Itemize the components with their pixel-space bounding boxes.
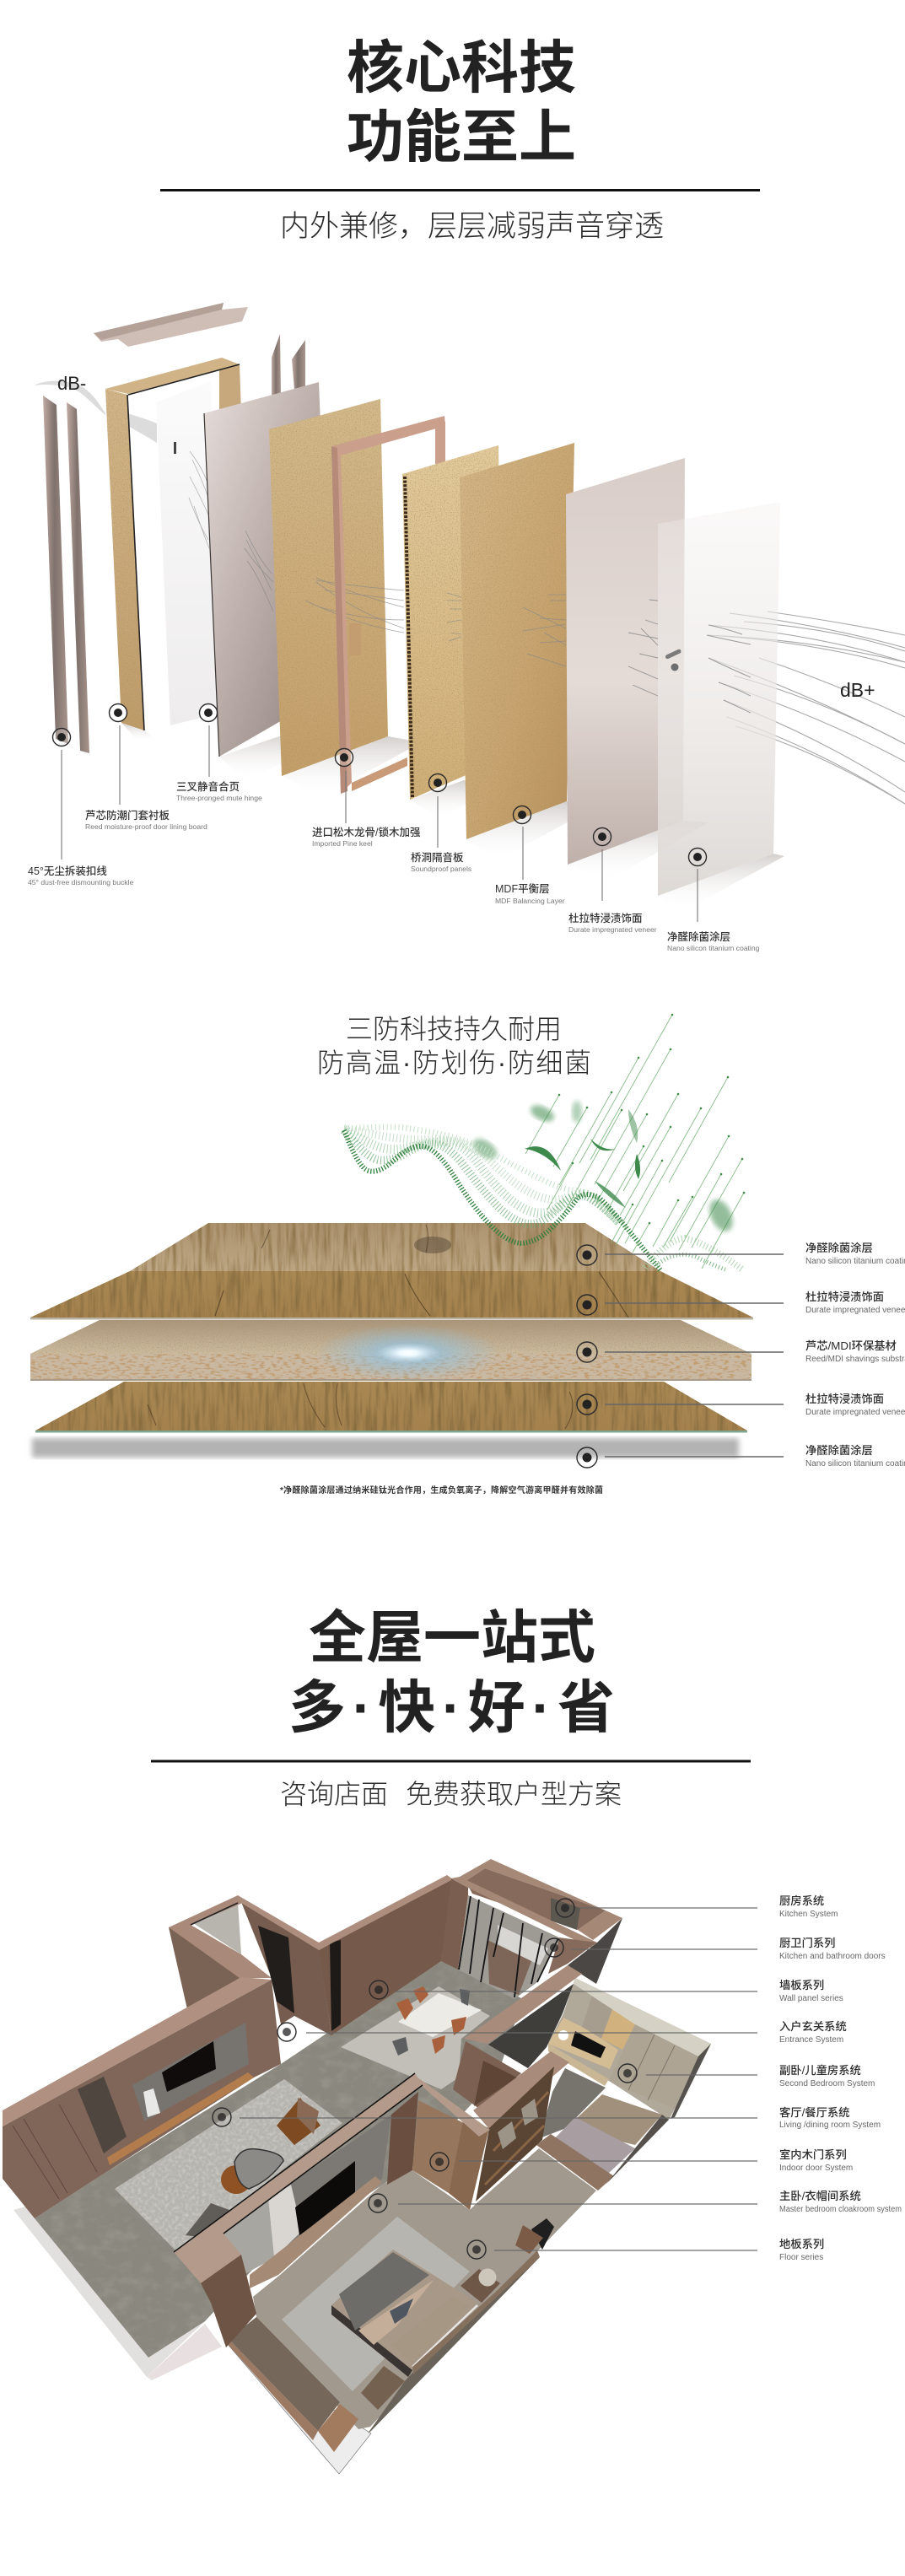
panel: MDF balancing bbox=[460, 443, 574, 839]
markers and leader lines bbox=[213, 1899, 757, 2259]
floor plan labels: 主卧/衣帽间系统 bbox=[779, 2189, 861, 2202]
sound strands bbox=[447, 593, 461, 641]
nightstands bbox=[361, 2269, 500, 2410]
side trim strip 2 bbox=[67, 402, 89, 753]
white back sheet bbox=[156, 381, 221, 725]
door labels: Reed moisture-proof door lining board bbox=[85, 822, 207, 831]
subtitle: 内外兼修: 内外兼修，层层减弱声音穿透 bbox=[280, 210, 664, 243]
door labels: 45°无尘拆装扣线 bbox=[28, 865, 107, 877]
floor plan labels bbox=[779, 1894, 902, 2262]
master bedroom floor bbox=[253, 2148, 596, 2429]
door labels: Nano silicon titanium coating bbox=[667, 944, 760, 952]
shadow under board bbox=[32, 1438, 739, 1458]
door handle bbox=[665, 649, 681, 671]
sound strands bbox=[523, 595, 566, 666]
floor plan labels: Kitchen and bathroom doors bbox=[779, 1952, 886, 1961]
shadow under panels bbox=[121, 723, 784, 911]
panel: MDF 1 bbox=[269, 399, 388, 776]
lower wall and TV bbox=[224, 2092, 489, 2288]
dB- label: dB- bbox=[57, 373, 86, 394]
sound waves in front bbox=[707, 625, 751, 713]
lintel trim bbox=[94, 303, 248, 347]
floor plan labels: Second Bedroom System bbox=[779, 2079, 875, 2088]
dB- sound wave bbox=[34, 381, 157, 443]
end block bbox=[318, 2404, 358, 2452]
door labels: 杜拉特浸渍饰面 bbox=[568, 912, 643, 924]
panel: honeycomb soundproof bbox=[402, 445, 503, 800]
floor plan labels: 地板系列 bbox=[779, 2238, 824, 2250]
floor plan labels: 副卧/儿童房系统 bbox=[779, 2063, 861, 2077]
door labels: Imported Pine keel bbox=[312, 839, 373, 848]
door labels bbox=[28, 780, 760, 952]
floor plan labels: Floor series bbox=[779, 2253, 823, 2262]
sound strands bbox=[189, 451, 209, 548]
heading: 三防科技: 三防科技持久耐用 bbox=[346, 1014, 562, 1044]
title: 核心科技 功能至上 bbox=[347, 36, 576, 170]
layer: top coating bbox=[130, 1223, 660, 1271]
cabinet bbox=[476, 2067, 554, 2201]
wood piece and bag bbox=[515, 2218, 554, 2254]
entrance wall bbox=[238, 1895, 331, 2035]
floor plan labels: Living /dining room System bbox=[779, 2121, 881, 2130]
strip by cabinet bbox=[473, 2051, 569, 2130]
floor plan labels: 室内木门系列 bbox=[779, 2148, 847, 2161]
door labels: 进口松木龙骨/锁木加强 bbox=[312, 826, 421, 838]
layer: reed substrate bbox=[30, 1320, 751, 1381]
door labels: 桥洞隔音板 bbox=[411, 851, 464, 864]
panel: impregnated veneer bbox=[566, 458, 685, 865]
sound strands crossing bbox=[305, 578, 404, 633]
door labels: 芦芯防潮门套衬板 bbox=[85, 809, 170, 822]
floor plan labels: Kitchen System bbox=[779, 1910, 838, 1919]
panel: nano coating bbox=[658, 502, 780, 896]
panel: pine keel frame bbox=[331, 416, 445, 794]
door labels: 45° dust-free dismounting buckle bbox=[28, 878, 133, 887]
upright trims bbox=[272, 334, 305, 400]
floor plan labels: 客厅/餐厅系统 bbox=[779, 2105, 849, 2119]
floor plan labels: 入户玄关系统 bbox=[779, 2019, 847, 2033]
central wall top bbox=[174, 2073, 490, 2347]
board labels: 净醛除菌涂层 bbox=[805, 1443, 873, 1457]
right ledge bbox=[368, 2250, 540, 2433]
TV wall bbox=[3, 1977, 281, 2218]
layer: lower veneer bbox=[35, 1382, 747, 1432]
board labels bbox=[805, 1241, 905, 1469]
frame top bbox=[105, 358, 240, 395]
dining rug bbox=[341, 1986, 490, 2089]
living rug bbox=[115, 2079, 342, 2252]
title: 全屋一站式 多快好省: 多·快·好·省 bbox=[288, 1676, 615, 1740]
door labels: MDF平衡层 bbox=[495, 883, 550, 895]
heading: 三防科技: 防高温·防划伤·防细菌 bbox=[317, 1048, 591, 1078]
title: 核心科技 功能至上: 核心科技 bbox=[347, 36, 576, 100]
floor plan labels: Wall panel series bbox=[779, 1994, 843, 2003]
subtitle: 咨询店面: 免费获取户型方案 bbox=[406, 1779, 622, 1809]
floor plan labels: Indoor door System bbox=[779, 2164, 853, 2173]
white base margin bbox=[13, 2185, 371, 2474]
heading: 三防科技 bbox=[317, 1014, 591, 1078]
door labels: 净醛除菌涂层 bbox=[667, 930, 730, 943]
door labels: 三叉静音合页 bbox=[176, 780, 240, 793]
armchair bbox=[277, 2098, 321, 2145]
title: 核心科技 功能至上: 功能至上 bbox=[347, 105, 576, 170]
middle dark wall bbox=[464, 1965, 582, 2068]
sound strands bbox=[628, 600, 658, 696]
green leaves bbox=[470, 1101, 737, 1235]
second bedroom bbox=[548, 1978, 711, 2120]
door exploded diagram bbox=[28, 303, 905, 952]
marble floor bbox=[35, 1957, 523, 2358]
hinge bbox=[174, 442, 176, 454]
title: 全屋一站式 多快好省: 全屋一站式 bbox=[309, 1606, 595, 1670]
board labels: 芦芯/MDI环保基材 bbox=[805, 1339, 897, 1352]
floor plan labels: Entrance System bbox=[779, 2035, 843, 2045]
green rain lines bbox=[525, 1015, 744, 1269]
upper left room bbox=[169, 1895, 272, 2009]
master rug bbox=[282, 2217, 470, 2391]
second bedroom floor and bed bbox=[536, 2068, 669, 2191]
coffee table and ottoman bbox=[221, 2149, 283, 2194]
sound strands bbox=[245, 531, 273, 612]
glow bbox=[315, 1324, 501, 1382]
door labels: Soundproof panels bbox=[411, 865, 471, 873]
panel: veneer 1 bbox=[204, 382, 331, 757]
door labels: Durate impregnated veneer bbox=[568, 925, 657, 934]
door labels: MDF Balancing Layer bbox=[495, 897, 565, 905]
back wall bbox=[319, 1875, 453, 2035]
footnote: *净醛除菌涂层通过纳米硅钛光合作用，生成负氧离子，降解空气游离甲醛并有效除菌 bbox=[280, 1485, 603, 1495]
green dotted wave bbox=[344, 1127, 742, 1270]
markers and leader lines bbox=[52, 703, 707, 922]
layer: upper veneer bbox=[30, 1271, 753, 1319]
handle block bbox=[349, 623, 361, 655]
door wall bbox=[453, 2041, 521, 2109]
side trim strip 1 bbox=[43, 396, 68, 744]
board labels: 杜拉特浸渍饰面 bbox=[805, 1290, 884, 1303]
frame jamb bbox=[105, 389, 144, 730]
title: 全屋一站式 多快好省 bbox=[288, 1606, 615, 1740]
floor plan labels: 墙板系列 bbox=[779, 1978, 824, 1991]
bench bbox=[226, 2317, 340, 2440]
frame far jamb bbox=[219, 364, 241, 420]
sound waves behind door bbox=[707, 612, 905, 804]
board labels: 净醛除菌涂层 bbox=[805, 1241, 873, 1254]
floor plan labels: 厨房系统 bbox=[779, 1894, 824, 1907]
floor plan bbox=[3, 1859, 902, 2474]
kitchen bbox=[441, 1859, 622, 1999]
dining table and chairs bbox=[392, 1986, 482, 2056]
markers and leader lines bbox=[577, 1245, 784, 1468]
floor plan labels: 厨卫门系列 bbox=[779, 1937, 835, 1949]
dB+ label: dB+ bbox=[840, 679, 875, 701]
pouf bbox=[186, 2203, 229, 2237]
master bed bbox=[331, 2250, 477, 2377]
subtitle: 咨询店面: 咨询店面 bbox=[280, 1779, 388, 1809]
board layers diagram bbox=[30, 1015, 905, 1469]
door labels: Three-pronged mute hinge bbox=[176, 794, 262, 802]
board labels: 杜拉特浸渍饰面 bbox=[805, 1392, 884, 1405]
